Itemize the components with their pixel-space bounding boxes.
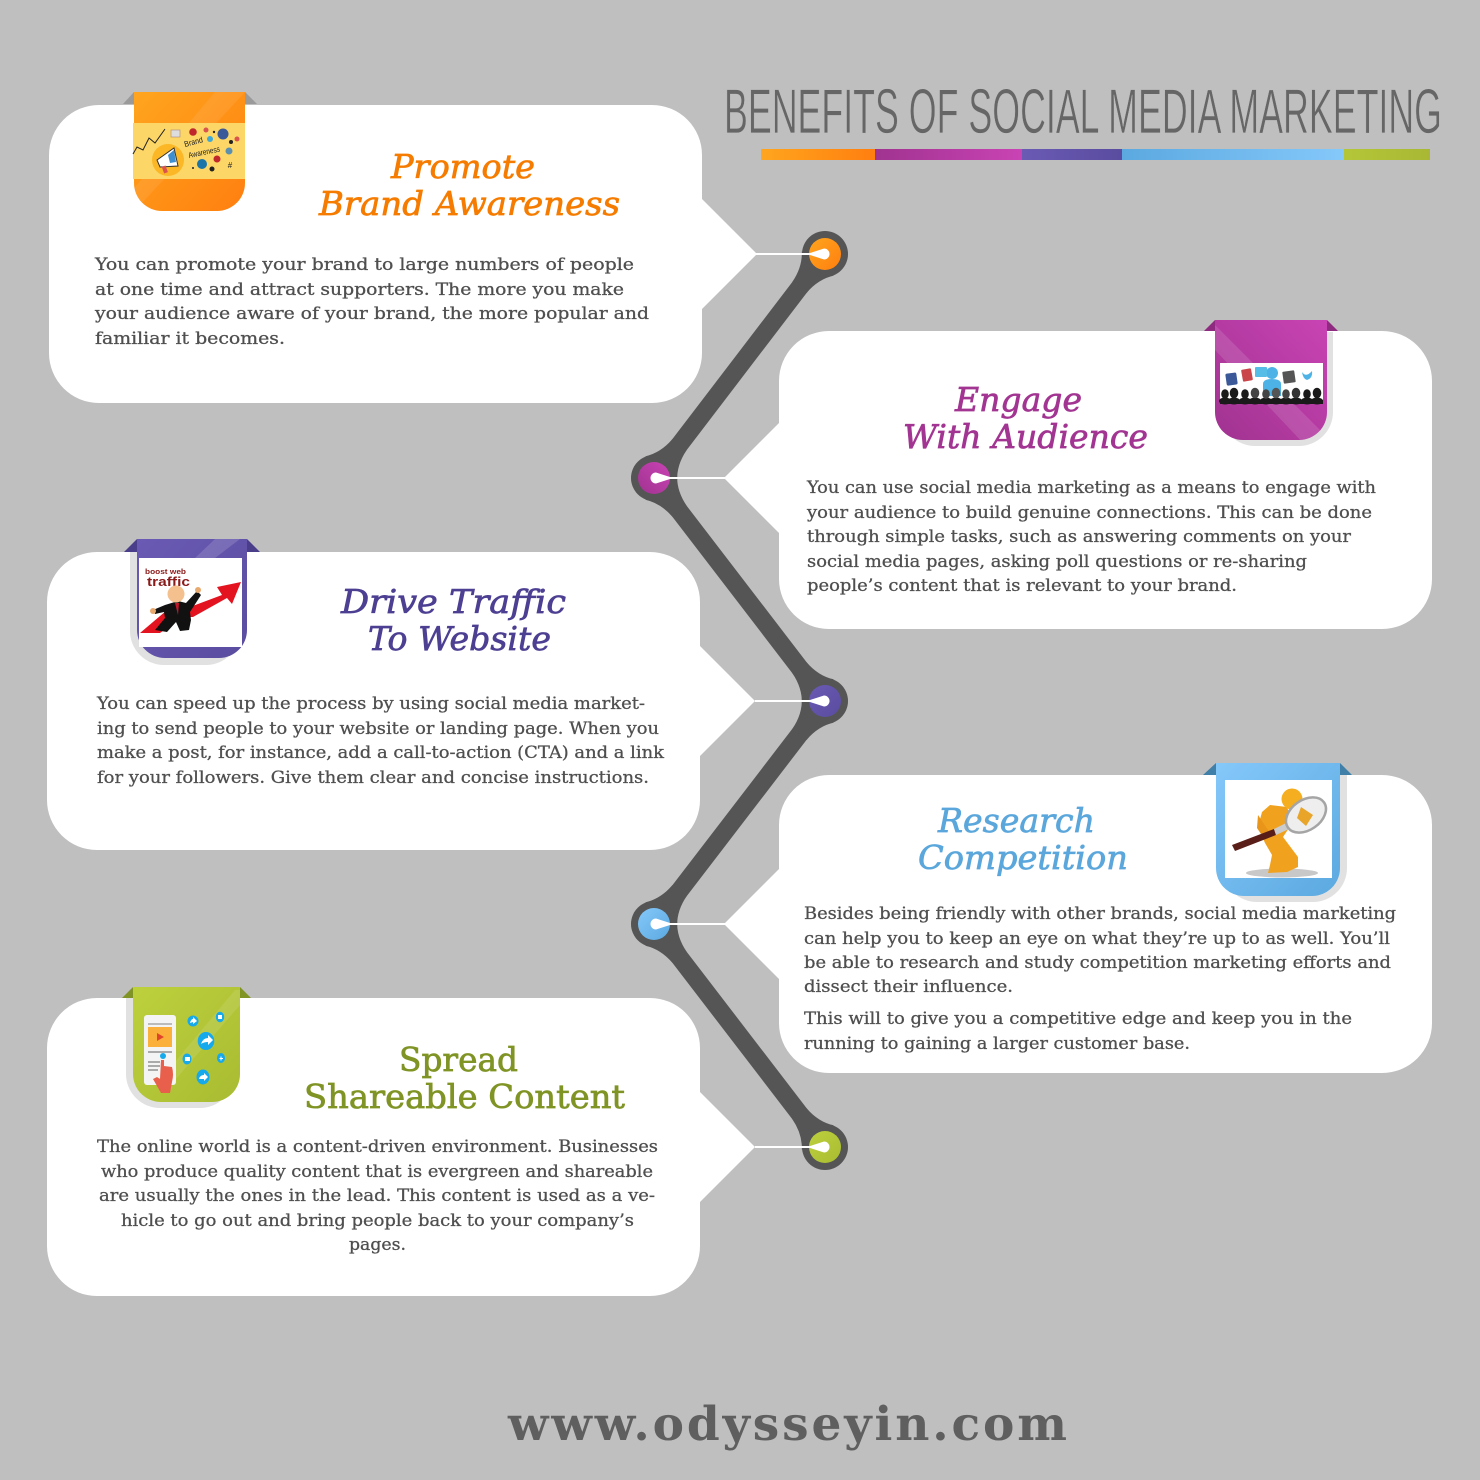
body text — [96, 694, 665, 788]
body text: This will to give you a competitive edge and keep you in the — [804, 1009, 1352, 1029]
body text: ing to send people to your website or landing page. When you — [97, 719, 659, 739]
panel: spread shareable content — [47, 987, 848, 1296]
body text: You can promote your brand to large numbers of people — [94, 255, 634, 275]
heading — [318, 147, 620, 223]
body text: You can speed up the process by using social media market- — [96, 694, 645, 714]
heading — [340, 582, 566, 658]
colour bar — [761, 149, 1430, 160]
body text: people’s content that is relevant to your brand. — [807, 576, 1237, 596]
node: blue — [631, 901, 727, 947]
heading: Drive Traffic — [340, 582, 566, 621]
body text: your audience aware of your brand, the more popular and — [94, 304, 649, 324]
icon: audience badge — [1204, 320, 1338, 446]
panel: drive traffic to website — [47, 539, 848, 850]
body text: at one time and attract supporters. The more you make — [95, 280, 624, 300]
body text: who produce quality content that is evergreen and shareable — [101, 1162, 653, 1182]
card shape — [47, 998, 755, 1296]
heading: Spread — [399, 1040, 518, 1079]
body text: running to gaining a larger customer base. — [804, 1034, 1190, 1054]
node: purple — [631, 455, 727, 501]
body text: Besides being friendly with other brands, social media marketing — [804, 904, 1396, 924]
body text: can help you to keep an eye on what they’re up to as well. You’ll — [804, 929, 1390, 949]
body text: You can use social media marketing as a means to engage with — [806, 478, 1376, 498]
heading: Engage — [954, 380, 1082, 419]
body text — [804, 904, 1396, 1054]
heading: Shareable Content — [304, 1077, 625, 1116]
heading — [304, 1040, 625, 1116]
heading: To Website — [368, 619, 551, 658]
heading — [903, 380, 1148, 456]
body text: be able to research and study competition marketing efforts and — [804, 953, 1391, 973]
body text: social media pages, asking poll questions or re-sharing — [807, 552, 1307, 572]
panel: promote brand awareness — [49, 92, 848, 403]
heading: With Audience — [903, 417, 1148, 456]
icon: web traffic badge — [124, 539, 260, 665]
node: green — [755, 1124, 848, 1170]
timeline connector — [645, 251, 834, 1150]
node: indigo — [755, 678, 848, 724]
heading: Brand Awareness — [318, 184, 620, 223]
icon: brand awareness badge — [120, 92, 257, 211]
card shape — [49, 105, 757, 403]
body text: pages. — [349, 1235, 406, 1255]
node: orange — [755, 231, 848, 277]
body text — [94, 255, 649, 349]
footer url: www.odysseyin.com — [507, 1397, 1067, 1452]
icon: web traffic badge: boost web — [145, 567, 186, 576]
body text: familiar it becomes. — [95, 329, 285, 349]
icon: brand awareness badge: Awareness — [188, 144, 221, 160]
body text: The online world is a content-driven environment. Businesses — [97, 1137, 658, 1157]
panel: engage with audience — [631, 320, 1432, 629]
heading: Competition — [918, 838, 1128, 877]
body text: through simple tasks, such as answering comments on your — [807, 527, 1352, 547]
card shape — [47, 552, 755, 850]
card shape — [724, 331, 1432, 629]
body text: are usually the ones in the lead. This content is used as a ve- — [99, 1186, 655, 1206]
icon: brand awareness badge: Brand — [183, 135, 204, 149]
heading: Research — [937, 801, 1095, 840]
body text — [97, 1137, 658, 1255]
body text: your audience to build genuine connections. This can be done — [806, 503, 1372, 523]
body text — [806, 478, 1376, 596]
body text: make a post, for instance, add a call-to-action (CTA) and a link — [97, 743, 665, 763]
body text: for your followers. Give them clear and concise instructions. — [97, 768, 649, 788]
card shape — [724, 775, 1432, 1073]
panel: research competition — [631, 763, 1432, 1073]
body text: dissect their influence. — [804, 977, 1013, 997]
icon: web traffic badge: traffic — [147, 574, 190, 589]
icon: brand awareness badge: # — [228, 161, 233, 170]
heading: Promote — [390, 147, 535, 186]
heading — [918, 801, 1128, 877]
body text: hicle to go out and bring people back to your company’s — [121, 1211, 634, 1231]
icon: research badge — [1203, 763, 1352, 902]
icon: shareable content badge — [122, 987, 251, 1108]
